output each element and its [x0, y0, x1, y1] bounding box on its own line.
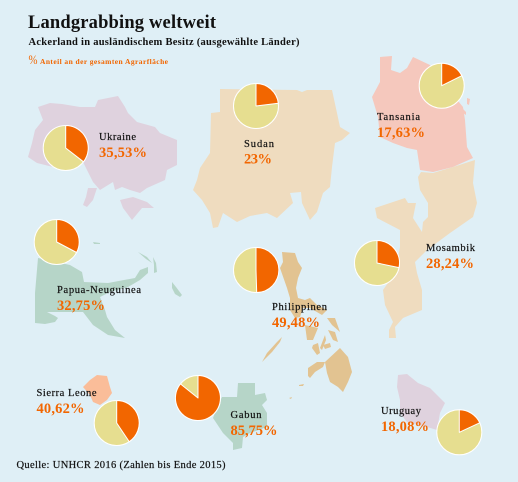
map: Gabun	[213, 383, 267, 450]
pie: Ukraine	[43, 125, 88, 170]
label: Sierra Leone: 40,62%	[36, 401, 84, 417]
map: Philippinen	[262, 252, 352, 399]
subtitle: Ackerland in ausländischem Besitz (ausgewählte Länder)	[28, 37, 300, 48]
pie: Mosambik	[354, 240, 400, 286]
label: Tansania: Tansania	[377, 112, 420, 123]
label: Sudan: Sudan	[244, 139, 275, 150]
map: Tansania	[372, 56, 473, 172]
map: Mosambik	[375, 160, 477, 338]
pie: Uruguay	[437, 410, 482, 455]
label: Uruguay	[381, 406, 429, 435]
pie: Sudan	[234, 84, 278, 128]
legend: %	[28, 52, 38, 67]
title: Landgrabbing weltweit	[28, 13, 217, 33]
map: Uruguay	[397, 374, 445, 430]
label: Gabun	[230, 410, 278, 439]
label: Philippinen: 49,48%	[272, 315, 320, 331]
label: Mosambik	[426, 243, 476, 272]
map: Ukraine	[28, 96, 177, 220]
label: Sierra Leone	[36, 388, 97, 417]
pie: Papua-Neuguinea	[34, 220, 79, 264]
label: Ukraine	[99, 132, 147, 161]
label: Philippinen	[272, 302, 328, 331]
map: Sudan	[193, 89, 350, 228]
legend: Anteil an der gesamten Agrarfläche	[40, 57, 169, 66]
label: Mosambik: 28,24%	[426, 256, 474, 272]
label: Gabun: Gabun	[230, 410, 262, 421]
legend	[28, 52, 169, 67]
label: Uruguay: Uruguay	[381, 406, 422, 417]
label: Ukraine: 35,53%	[99, 145, 147, 161]
label: Sierra Leone: Sierra Leone	[36, 388, 97, 399]
label: Papua-Neuguinea	[57, 285, 141, 314]
label: Mosambik: Mosambik	[426, 243, 476, 254]
label: Gabun: 85,75%	[230, 423, 278, 439]
map: Sierra Leone	[83, 375, 112, 405]
label: Tansania	[377, 112, 425, 141]
label: Philippinen: Philippinen	[272, 302, 328, 313]
pie: Tansania	[419, 63, 464, 108]
label: Ukraine: Ukraine	[99, 132, 136, 143]
label: Papua-Neuguinea: Papua-Neuguinea	[57, 285, 141, 296]
label: Tansania: 17,63%	[377, 125, 425, 141]
source note: Quelle: UNHCR 2016 (Zahlen bis Ende 2015)	[16, 460, 226, 471]
map: Papua-Neuguinea	[35, 242, 182, 338]
label: Uruguay: 18,08%	[381, 419, 429, 435]
pie: Sierra Leone	[94, 400, 139, 446]
pie: Gabun	[175, 376, 220, 420]
pie: Philippinen	[234, 247, 279, 292]
label: Sudan	[244, 139, 275, 168]
label: Sudan: 23%	[244, 152, 272, 168]
label: Papua-Neuguinea: 32,75%	[57, 298, 105, 314]
